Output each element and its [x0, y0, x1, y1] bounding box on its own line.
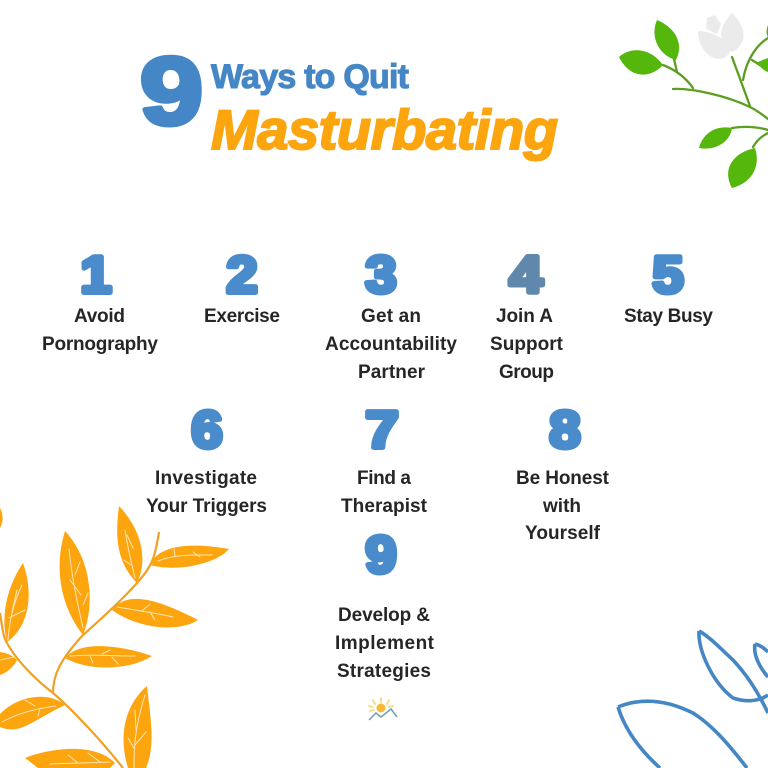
label: Be Honest with Yourself: with — [542, 496, 581, 517]
step 5 — [624, 246, 713, 327]
number 8: 8 — [549, 401, 581, 459]
icon: sun and mountain logo — [369, 698, 397, 720]
label: Find a Therapist — [341, 468, 428, 517]
label: Find a Therapist: Therapist — [341, 496, 428, 517]
label: Investigate Your Triggers: Your Triggers — [146, 496, 267, 517]
label: Join A Support Group: Support — [490, 334, 564, 355]
number 3: 3 — [365, 246, 397, 304]
number 7: 7 — [365, 400, 399, 459]
title line: Ways to Quit: Ways to Quit — [211, 58, 409, 96]
label: Avoid Pornography — [42, 306, 158, 355]
number 4: 4 — [509, 245, 543, 304]
label: Stay Busy: Stay Busy — [624, 306, 713, 327]
number 9: 9 — [365, 526, 397, 584]
orange branch decoration — [0, 506, 229, 768]
big numeral 9: 9 — [140, 38, 203, 145]
step 2 — [204, 246, 280, 327]
label: Develop & Implement Strategies: Develop & — [338, 605, 430, 626]
label: Be Honest with Yourself: Yourself — [525, 523, 601, 544]
number 1: 1 — [80, 246, 112, 304]
step 9 — [335, 526, 435, 682]
title — [140, 38, 558, 161]
blue outline leaves decoration — [618, 631, 768, 768]
title line: Masturbating: Masturbating — [211, 98, 558, 161]
label: Avoid Pornography: Avoid — [74, 306, 125, 327]
number 2: 2 — [226, 246, 258, 304]
icon: grey tulip watermark — [698, 13, 744, 59]
number 5: 5 — [652, 246, 684, 304]
label: Develop & Implement Strategies — [335, 605, 435, 682]
label: Avoid Pornography: Pornography — [42, 334, 158, 355]
label: Join A Support Group: Join A — [496, 306, 553, 327]
label: Be Honest with Yourself: Be Honest — [516, 468, 610, 489]
label: Get an Accountability Partner: Get an — [361, 306, 421, 327]
label: Find a Therapist: Find a — [357, 468, 411, 489]
label: Be Honest with Yourself — [516, 468, 610, 544]
label: Join A Support Group — [490, 306, 564, 383]
step 8 — [516, 401, 610, 544]
step 7 — [341, 400, 428, 517]
label: Get an Accountability Partner: Accountability — [325, 334, 457, 355]
step 6 — [146, 401, 267, 517]
label: Get an Accountability Partner: Partner — [358, 362, 426, 383]
step 1 — [42, 246, 158, 355]
label: Exercise: Exercise — [204, 306, 280, 327]
green branch decoration — [619, 20, 768, 188]
label: Develop & Implement Strategies: Implement — [335, 633, 435, 654]
number 6: 6 — [191, 401, 223, 459]
label: Develop & Implement Strategies: Strategies — [337, 661, 431, 682]
label: Join A Support Group: Group — [499, 362, 554, 383]
label: Get an Accountability Partner — [325, 306, 457, 383]
step 3 — [325, 246, 457, 383]
label: Investigate Your Triggers — [146, 468, 267, 517]
label: Investigate Your Triggers: Investigate — [155, 468, 257, 489]
step 4 — [490, 245, 564, 383]
